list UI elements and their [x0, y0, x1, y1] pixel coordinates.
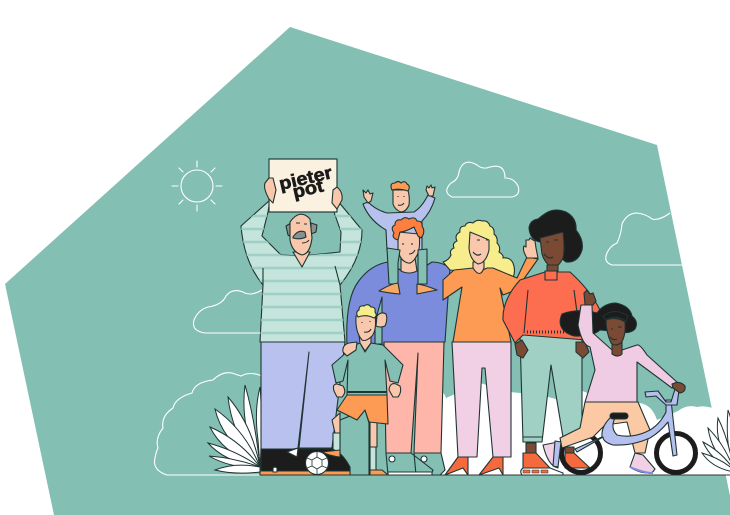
- red sneakers: [523, 453, 590, 468]
- hands: [515, 340, 589, 358]
- man salmon trousers: [384, 342, 444, 453]
- handlebar: [645, 389, 679, 405]
- afro hair: [529, 210, 582, 262]
- right shoe: [630, 453, 655, 473]
- white skate sole: [521, 468, 563, 475]
- coral sweater: [503, 272, 600, 343]
- person: boy on shoulders: [363, 182, 435, 250]
- logo text: [277, 162, 337, 205]
- boy fists: [333, 384, 401, 397]
- boy head: [356, 314, 376, 340]
- rear wheel: [562, 434, 600, 472]
- man blue shirt: [347, 262, 450, 345]
- boy sweater: [363, 195, 435, 250]
- boy neck: [359, 335, 371, 351]
- bush: white background behind legs: [430, 383, 730, 475]
- teal gap under arm: [375, 297, 382, 344]
- face: [606, 318, 625, 345]
- teal gap between legs: [340, 410, 369, 475]
- boy legs: [332, 413, 377, 447]
- boy head: [393, 190, 409, 212]
- grandfather ears hair: [286, 223, 317, 237]
- person: grandfather holding sign: [240, 158, 363, 449]
- soccer ball: [306, 452, 328, 474]
- person: man in blue: [347, 218, 450, 475]
- peach legs: [560, 402, 650, 453]
- person: woman in coral sweater: [503, 210, 600, 475]
- person: woman with blond hair: [443, 220, 538, 475]
- red heels: [445, 457, 503, 475]
- logo text: pieter: [277, 162, 334, 194]
- front wheel: [656, 434, 696, 472]
- man head: [398, 232, 420, 263]
- neck: [473, 262, 484, 274]
- man hand on boy shoulder: [343, 342, 357, 356]
- grandfather striped sweater: [241, 200, 362, 342]
- cloud: top centre: [447, 162, 519, 197]
- hair: [560, 303, 636, 336]
- face: [540, 232, 564, 268]
- bike frame: [575, 400, 677, 456]
- raised hand: [523, 238, 538, 258]
- fern: right: [702, 410, 730, 472]
- sign: pieter pot: [269, 159, 337, 212]
- mint trousers: [520, 335, 582, 442]
- ankles: [526, 443, 574, 453]
- man neck: [401, 258, 417, 273]
- shoe sole: [260, 471, 350, 475]
- neck: [547, 265, 558, 272]
- logo text: pot: [291, 176, 325, 202]
- man roller skates: [386, 453, 445, 475]
- boy shoes: [322, 450, 388, 475]
- icon: sun: [172, 161, 222, 211]
- blond hair: [443, 220, 514, 278]
- saddle: [610, 413, 628, 419]
- hair fringe: [603, 312, 628, 321]
- orange sweater: [443, 257, 538, 342]
- boy hair: [391, 182, 409, 191]
- grandfather black shoes: [261, 449, 350, 475]
- bush: left outline: [154, 373, 262, 475]
- cloud: right: [606, 213, 682, 265]
- pink sweater: [578, 305, 678, 402]
- left shoe: [543, 442, 558, 468]
- child shoes: [379, 283, 437, 294]
- hands: [584, 290, 685, 393]
- grandfather trousers: [261, 342, 345, 449]
- boy hands: [363, 185, 435, 203]
- grandfather moustache: [293, 231, 306, 239]
- fern: left: [208, 385, 262, 473]
- person: boy with shorts: [260, 305, 403, 475]
- grandfather collar neck: [293, 252, 310, 267]
- ground line: [260, 474, 730, 476]
- child legs on shoulders: [387, 248, 427, 284]
- man hand behind boy head: [376, 313, 387, 327]
- neck: [612, 342, 622, 356]
- person: girl with bicycle: [543, 290, 696, 473]
- boy sweater: [332, 343, 403, 395]
- boy blond hair: [357, 305, 376, 318]
- cloud: left: [193, 290, 262, 333]
- boy orange shorts: [337, 395, 388, 424]
- pink trousers: [452, 342, 511, 457]
- face: [469, 232, 489, 264]
- grandfather hands: [264, 178, 342, 209]
- collar: [545, 271, 557, 280]
- man orange hair: [392, 218, 424, 240]
- grandfather head: [290, 214, 312, 255]
